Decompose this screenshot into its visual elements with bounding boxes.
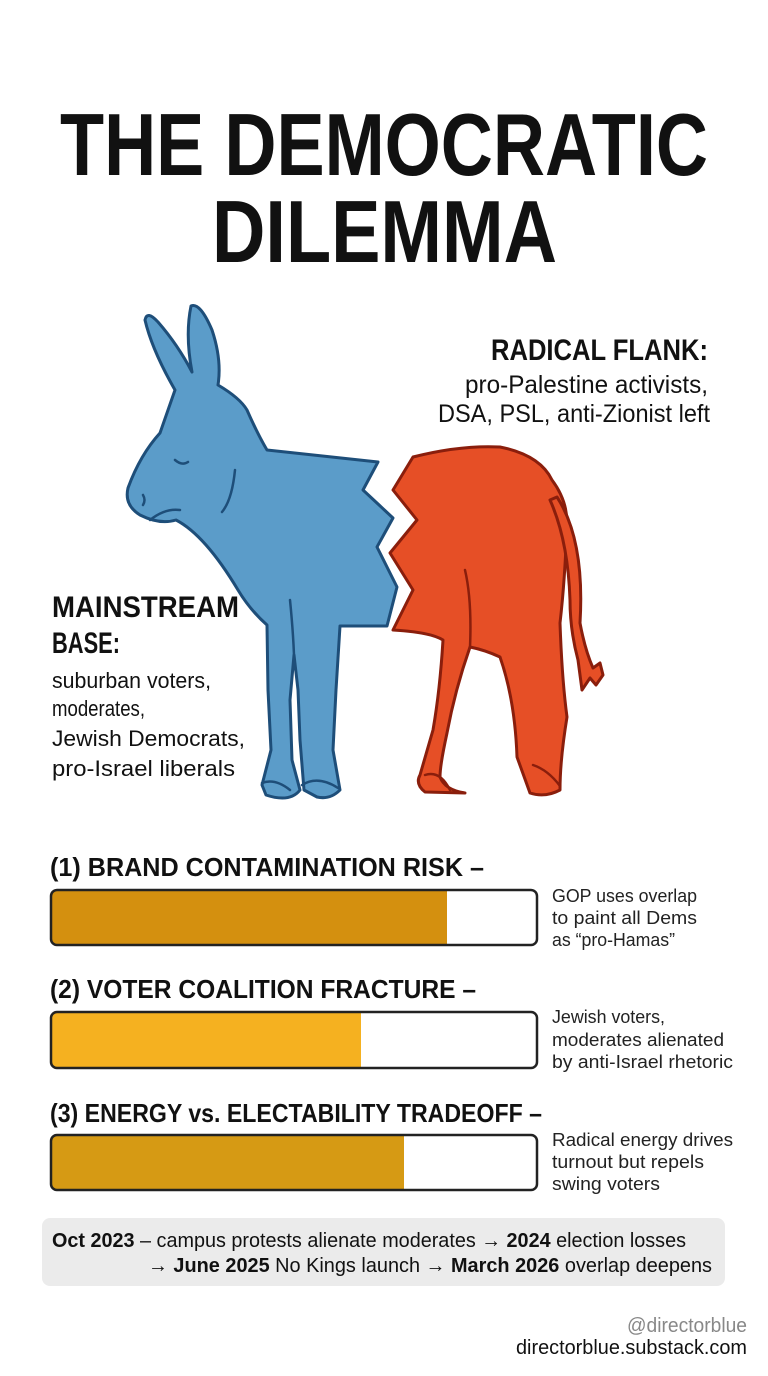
- donkey back half (red): [390, 447, 603, 795]
- bar 3: [51, 1135, 537, 1190]
- label: mainstream base: moderates,: [52, 696, 145, 721]
- label: radical flank: RADICAL FLANK:: [491, 334, 708, 367]
- footer credit: [516, 1315, 747, 1359]
- title: DILEMMA: [212, 182, 557, 281]
- label: radical flank: [438, 334, 710, 428]
- label: mainstream base: [52, 591, 245, 781]
- risk 1: brand contamination: GOP uses overlap: [552, 886, 697, 906]
- timeline callout: Oct 2023 – campus protests alienate moderates → 2024 election losses: [52, 1230, 686, 1252]
- risk 2: voter coalition fracture: (2) VOTER COALITION FRACTURE –: [50, 974, 476, 1004]
- label: mainstream base: BASE:: [52, 627, 120, 660]
- risk 1: brand contamination: as “pro-Hamas”: [552, 930, 675, 950]
- bar 2: [51, 1012, 537, 1068]
- risk 3: energy vs electability: [50, 1098, 733, 1194]
- risk 3: energy vs electability: (3) ENERGY vs. ELECTABILITY TRADEOFF –: [50, 1098, 542, 1128]
- donkey illustration: [127, 306, 603, 798]
- risk 1: brand contamination: to paint all Dems: [552, 908, 697, 928]
- risk 2: voter coalition fracture: moderates alienated: [552, 1030, 724, 1050]
- risk 2: voter coalition fracture: [50, 974, 733, 1072]
- label: mainstream base: Jewish Democrats,: [52, 726, 245, 751]
- timeline callout: → June 2025 No Kings launch → March 2026 overlap deepens: [148, 1255, 712, 1277]
- label: radical flank: DSA, PSL, anti-Zionist left: [438, 400, 710, 428]
- risk 3: energy vs electability: swing voters: [552, 1174, 660, 1194]
- risk 2: voter coalition fracture: by anti-Israel rhetoric: [552, 1052, 733, 1072]
- footer credit: @directorblue: [627, 1315, 747, 1337]
- risk 3: energy vs electability: Radical energy drives: [552, 1130, 733, 1150]
- risk 1: brand contamination: (1) BRAND CONTAMINATION RISK –: [50, 852, 484, 882]
- label: mainstream base: MAINSTREAM: [52, 591, 239, 624]
- label: mainstream base: suburban voters,: [52, 668, 211, 693]
- label: mainstream base: pro-Israel liberals: [52, 756, 235, 781]
- risk 2: voter coalition fracture: Jewish voters,: [552, 1007, 665, 1027]
- donkey front half (blue): [127, 306, 397, 798]
- footer credit: directorblue.substack.com: [516, 1337, 747, 1359]
- title: [60, 95, 708, 281]
- timeline callout: [42, 1218, 725, 1286]
- risk 1: brand contamination: [50, 852, 697, 950]
- label: radical flank: pro-Palestine activists,: [465, 371, 708, 399]
- risk 3: energy vs electability: turnout but repels: [552, 1152, 704, 1172]
- bar 1: [51, 890, 537, 945]
